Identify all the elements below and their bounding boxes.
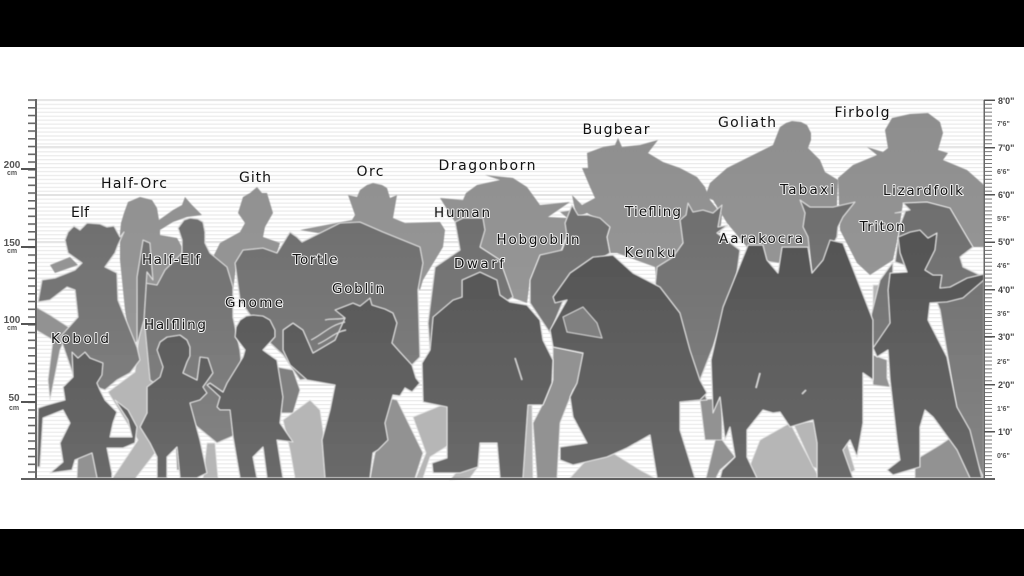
label: Hobgoblin: Hobgoblin	[496, 232, 580, 248]
lower body fragments	[36, 285, 984, 480]
right axis, feet and inches: 4'0"	[998, 285, 1014, 295]
label: Half-Orc: Half-Orc	[101, 176, 167, 192]
right axis, feet and inches: 1'0'	[998, 427, 1012, 437]
label: Elf: Elf	[71, 205, 90, 221]
silhouette: Gnome	[207, 315, 293, 478]
silhouette: back of Triton	[870, 262, 893, 350]
baseline	[21, 478, 995, 480]
chart background stripes	[36, 99, 984, 479]
left axis, centimetres: 100	[4, 315, 21, 326]
label: Tabaxi: Tabaxi	[779, 182, 834, 198]
label: Firbolg: Firbolg	[834, 105, 890, 121]
left axis, centimetres: cm	[7, 248, 17, 255]
right axis, feet and inches: 3'6"	[997, 311, 1010, 318]
label: Half-Elf: Half-Elf	[142, 252, 201, 268]
left axis, centimetres: 200	[4, 160, 21, 171]
label: Bugbear: Bugbear	[582, 122, 650, 138]
silhouette: Goblin	[283, 298, 420, 478]
silhouette: Dwarf	[422, 272, 553, 478]
label: Aarakocra: Aarakocra	[719, 231, 803, 247]
left axis, centimetres: 50	[8, 393, 20, 404]
name labels	[51, 105, 963, 347]
label: Halfling: Halfling	[144, 317, 206, 333]
silhouette: Tiefling	[655, 203, 740, 402]
silhouette: Triton	[873, 230, 984, 478]
right axis, feet and inches: 7'6"	[997, 121, 1010, 128]
silhouette: Half-Elf	[137, 218, 245, 443]
right axis, feet and inches: 5'0"	[998, 237, 1014, 247]
left axis, centimetres: cm	[9, 405, 19, 412]
left axis, centimetres: cm	[7, 325, 17, 332]
label: Gnome: Gnome	[225, 295, 283, 311]
bottom black bar	[0, 529, 1024, 576]
silhouette: Kenku	[550, 255, 707, 478]
right axis, feet and inches: 1'6"	[997, 406, 1010, 413]
label: Goblin: Goblin	[332, 281, 384, 297]
right axis, feet and inches: 3'0"	[998, 332, 1014, 342]
right axis, feet and inches: 2'0"	[998, 380, 1014, 390]
right axis, feet and inches: 0'6"	[997, 453, 1010, 460]
label: Kenku: Kenku	[624, 245, 676, 261]
silhouette: Tabaxi	[800, 200, 855, 275]
back row silhouettes	[50, 113, 984, 345]
silhouette: Tortle	[235, 222, 423, 380]
label: Kobold: Kobold	[51, 331, 109, 347]
label: Lizardfolk: Lizardfolk	[883, 183, 963, 199]
silhouette: Lizardfolk	[895, 202, 984, 478]
silhouette: Firbolg	[838, 113, 984, 275]
silhouette: Human	[428, 218, 513, 350]
right axis, feet and inches: 5'6"	[997, 216, 1010, 223]
top black bar	[0, 0, 1024, 47]
silhouette: Elf	[38, 223, 140, 390]
middle row silhouettes	[38, 200, 984, 478]
silhouette: Gith	[213, 187, 280, 290]
silhouette: Kobold	[37, 352, 137, 478]
right axis, feet and inches: 2'6"	[997, 359, 1010, 366]
label: Orc: Orc	[356, 164, 384, 180]
left axis, centimetres	[4, 99, 37, 480]
silhouette: Bugbear	[560, 138, 722, 285]
label: Gith: Gith	[239, 170, 271, 186]
left axis, centimetres: 150	[4, 238, 21, 249]
label: Tiefling: Tiefling	[624, 204, 681, 220]
label: Dragonborn: Dragonborn	[438, 158, 536, 174]
label: Dwarf: Dwarf	[454, 256, 505, 272]
label: Triton: Triton	[858, 219, 904, 235]
right axis, feet and inches: 4'6"	[997, 263, 1010, 270]
silhouette: Half-Orc	[50, 197, 202, 345]
silhouette: Goliath	[705, 121, 838, 263]
label: Goliath: Goliath	[718, 115, 776, 131]
right axis, feet and inches: 7'0"	[998, 143, 1014, 153]
silhouette: Aarakocra	[711, 240, 873, 478]
label: Tortle: Tortle	[292, 252, 338, 268]
right axis, feet and inches	[984, 96, 1014, 480]
silhouette: Dragonborn	[440, 175, 570, 303]
label: Human: Human	[434, 205, 490, 221]
silhouette: Halfling	[140, 335, 213, 478]
front row silhouettes	[37, 230, 984, 478]
right axis, feet and inches: 8'0"	[998, 96, 1014, 106]
left axis, centimetres: cm	[7, 170, 17, 177]
right axis, feet and inches: 6'0"	[998, 190, 1014, 200]
silhouette: Hobgoblin	[530, 205, 610, 333]
right axis, feet and inches: 6'6"	[997, 169, 1010, 176]
silhouette: Orc	[300, 183, 445, 290]
